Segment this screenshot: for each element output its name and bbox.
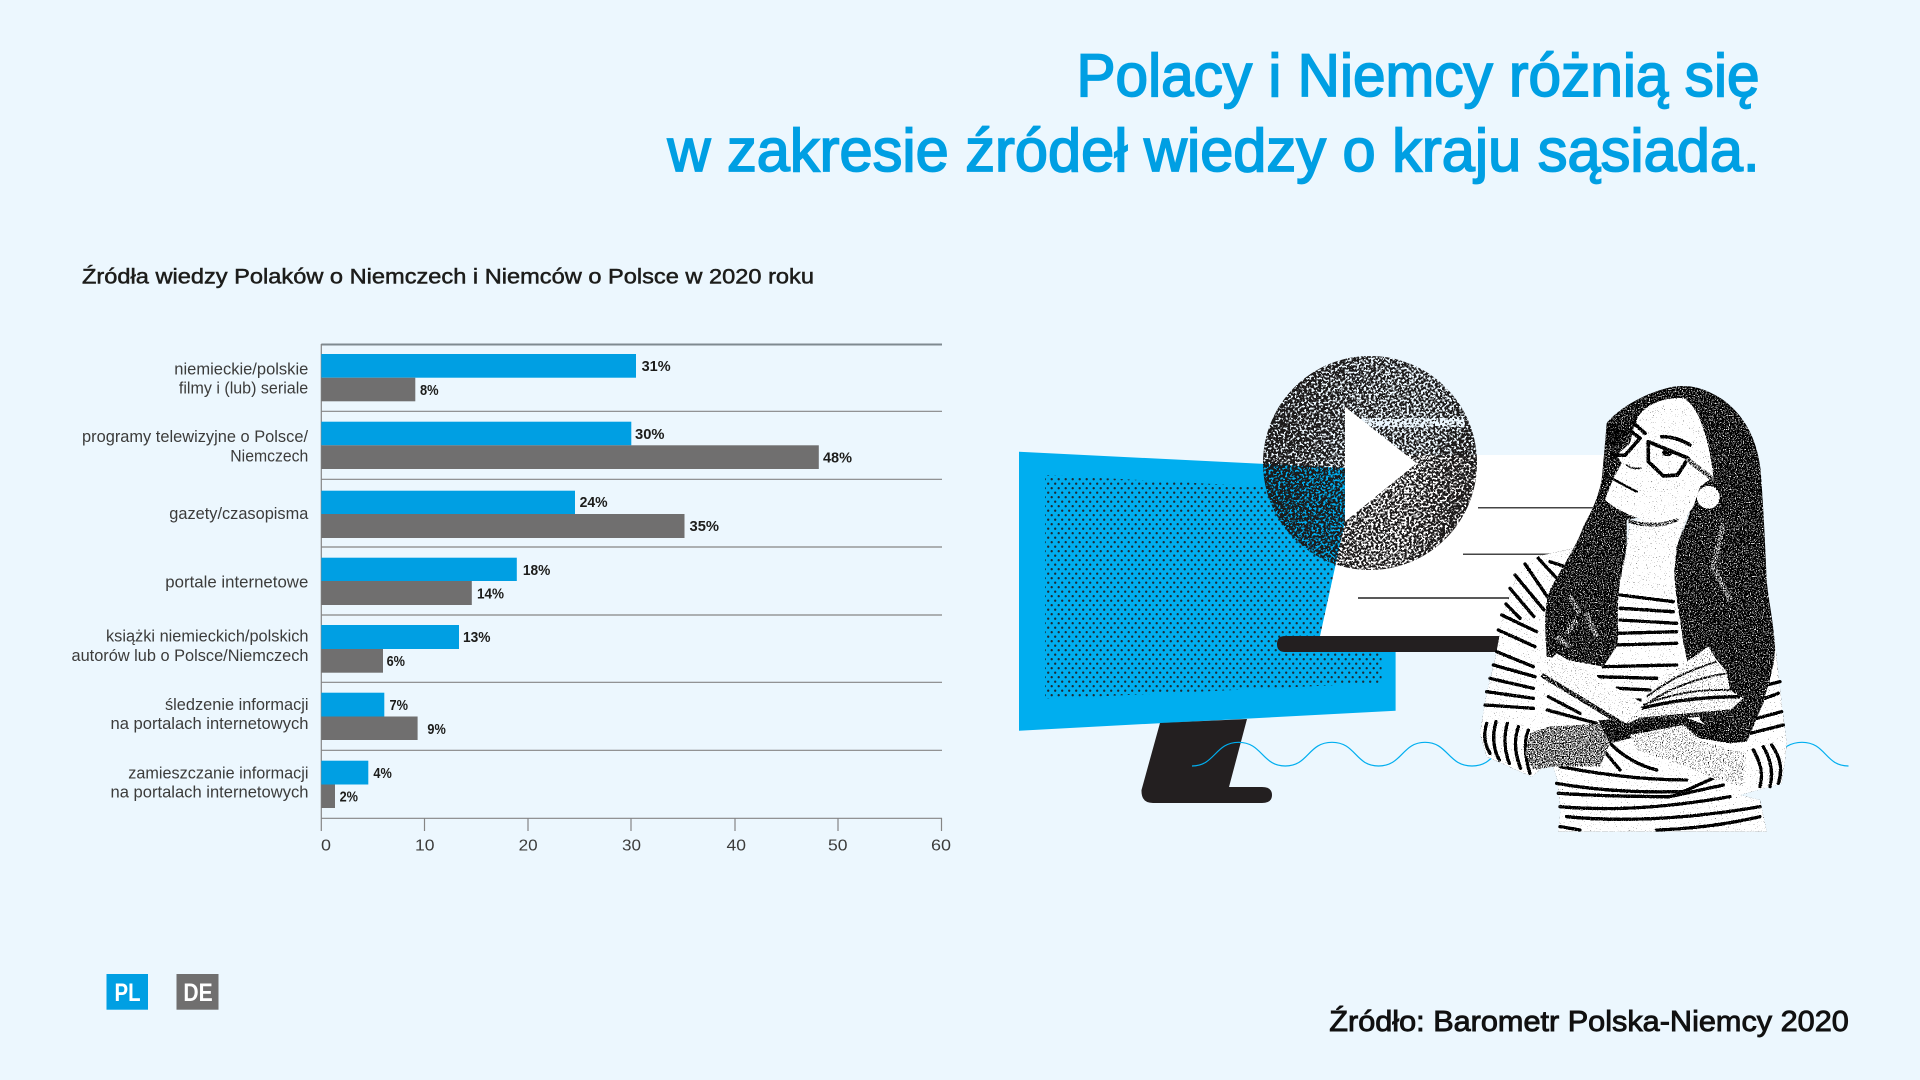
title bbox=[667, 42, 1760, 184]
group: gazety/czasopisma: gazety/czasopisma bbox=[169, 504, 309, 523]
shadow under book bbox=[1598, 717, 1747, 743]
group: zamieszczanie informacji: zamieszczanie informacji bbox=[128, 763, 308, 782]
group: filmy i seriale: 31% bbox=[642, 359, 671, 375]
group: śledzenie informacji bbox=[110, 693, 446, 740]
axis labels bbox=[321, 838, 951, 854]
title: w zakresie źródeł wiedzy o kraju sąsiada. bbox=[667, 117, 1760, 184]
group: filmy i seriale: 8% bbox=[420, 383, 439, 399]
ear bbox=[1697, 486, 1720, 509]
book: edges bbox=[1542, 675, 1730, 727]
monitor bar bbox=[1277, 636, 1500, 652]
group: programy telewizyjne: Niemczech bbox=[230, 447, 308, 466]
title: Polacy i Niemcy różnią się bbox=[1076, 42, 1760, 109]
book bbox=[1538, 647, 1743, 727]
group: książki bbox=[72, 625, 491, 673]
group: śledzenie informacji: śledzenie informacji bbox=[165, 695, 308, 714]
source note: Źródło: Barometr Polska-Niemcy 2020 bbox=[1329, 1005, 1849, 1038]
group: książki: książki niemieckich/polskich bbox=[106, 627, 308, 646]
woman with book bbox=[1480, 386, 1787, 832]
group: śledzenie informacji: 9% bbox=[427, 722, 446, 738]
group: programy telewizyjne: programy telewizyjne o Polsce/ bbox=[82, 427, 308, 446]
axis labels: 60 bbox=[931, 838, 951, 854]
disc texture bbox=[1263, 356, 1477, 570]
group: filmy i seriale: filmy i (lub) seriale bbox=[179, 378, 308, 397]
hair highlights bbox=[1557, 523, 1730, 647]
left glasses dark lens bbox=[1607, 422, 1630, 445]
torso stripes bbox=[1547, 595, 1760, 830]
group: programy telewizyjne: 48% bbox=[823, 451, 852, 467]
chart grid and axis bbox=[321, 344, 942, 831]
monitor stand bbox=[1141, 719, 1272, 803]
left forearm bbox=[1525, 723, 1610, 770]
screen text lines bbox=[1358, 508, 1594, 598]
play triangle bbox=[1345, 407, 1417, 522]
monitor screen: blue bbox=[1019, 452, 1396, 731]
halftone dots bbox=[1045, 475, 1382, 699]
book: right pages bbox=[1627, 647, 1743, 725]
group: gazety/czasopisma: 24% bbox=[580, 495, 608, 511]
group: filmy i seriale bbox=[174, 354, 671, 401]
group: zamieszczanie informacji bbox=[110, 761, 392, 808]
eye bbox=[1662, 449, 1673, 456]
group: portale internetowe bbox=[165, 558, 550, 605]
neck bbox=[1620, 508, 1690, 597]
illustration: monitor bbox=[1019, 452, 1625, 803]
group: programy telewizyjne: 30% bbox=[635, 427, 665, 443]
legend bbox=[106, 974, 218, 1010]
axis labels: 0 bbox=[321, 838, 331, 854]
right hand bbox=[1630, 725, 1747, 787]
face bbox=[1605, 398, 1713, 524]
wave line bbox=[1192, 742, 1848, 766]
book: left pages bbox=[1538, 653, 1643, 723]
book: page lines bbox=[1643, 662, 1730, 705]
group: zamieszczanie informacji: na portalach internetowych bbox=[110, 782, 308, 801]
group: portale internetowe: 18% bbox=[523, 563, 550, 579]
group: książki: autorów lub o Polsce/Niemczech bbox=[72, 646, 308, 665]
axis labels: 50 bbox=[828, 838, 848, 854]
sleeve stripes bbox=[1485, 558, 1783, 787]
group: programy telewizyjne bbox=[82, 422, 852, 469]
monitor screen: white bbox=[1320, 455, 1625, 636]
group: śledzenie informacji: 7% bbox=[390, 698, 408, 714]
legend: DE: DE bbox=[183, 979, 213, 1007]
axis labels: 30 bbox=[622, 838, 641, 854]
group: śledzenie informacji: na portalach internetowych bbox=[110, 714, 308, 733]
bar chart bbox=[72, 344, 951, 854]
chart heading: Źródła wiedzy Polaków o Niemczech i Niemców o Polsce w 2020 roku bbox=[82, 266, 814, 288]
body and sleeves bbox=[1480, 548, 1787, 832]
group: filmy i seriale: niemieckie/polskie bbox=[174, 359, 308, 378]
group: gazety/czasopisma bbox=[169, 491, 719, 538]
play disc bbox=[1263, 356, 1477, 570]
axis labels: 40 bbox=[726, 838, 746, 854]
group: książki: 6% bbox=[387, 654, 405, 670]
group: portale internetowe: 14% bbox=[477, 586, 504, 602]
hair bbox=[1545, 386, 1775, 742]
gap between arm and torso bbox=[1533, 683, 1548, 727]
face details bbox=[1613, 423, 1712, 525]
group: książki: 13% bbox=[463, 630, 491, 646]
group: zamieszczanie informacji: 2% bbox=[340, 790, 358, 806]
group: zamieszczanie informacji: 4% bbox=[373, 766, 392, 782]
axis labels: 20 bbox=[519, 838, 538, 854]
group: gazety/czasopisma: 35% bbox=[690, 519, 719, 535]
legend: PL: PL bbox=[114, 979, 140, 1007]
group: portale internetowe: portale internetowe bbox=[165, 572, 308, 591]
axis labels: 10 bbox=[415, 838, 435, 854]
